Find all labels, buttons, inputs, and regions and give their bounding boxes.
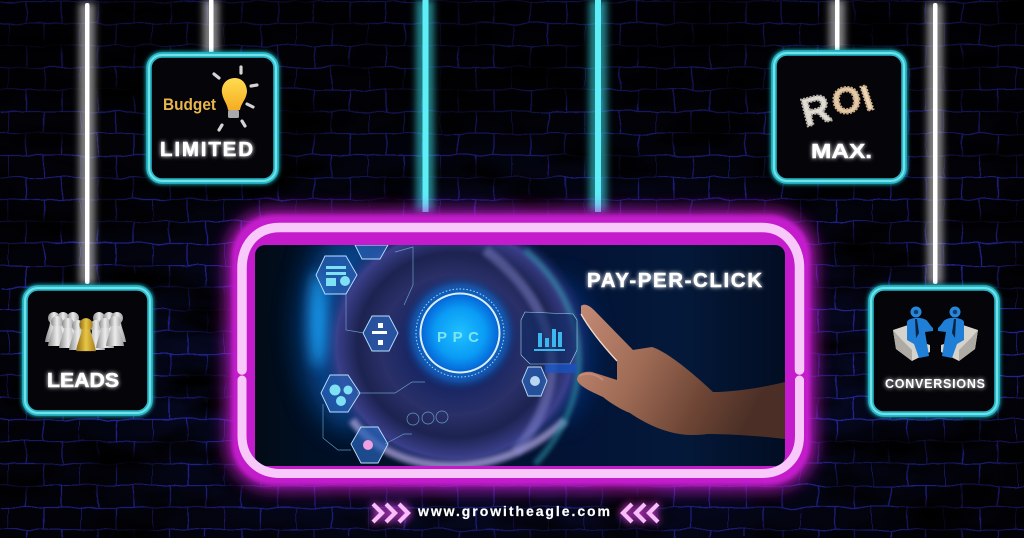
conversions label: CONVERSIONS (885, 377, 985, 391)
max label: MAX. (811, 141, 872, 163)
panel: main PPC neon frame (226, 210, 816, 490)
panel: budget limited (149, 55, 276, 181)
image: PPC hand illustration (255, 245, 785, 466)
leads label: LEADS (47, 370, 119, 392)
icon: ROI jewelled letters: R (797, 86, 836, 136)
icon: ROI jewelled letters (797, 77, 878, 136)
footer chevrons right (623, 504, 658, 522)
icon: pawns (45, 312, 126, 351)
neon tube (242, 228, 800, 370)
chart hexagon (521, 312, 577, 373)
budget label: Budget (163, 95, 216, 114)
icon: hand (577, 305, 785, 439)
icon: ROI jewelled letters: I (856, 77, 878, 119)
white neon line far left (79, 3, 95, 284)
cyan neon line left (416, 0, 434, 212)
hexagon icons (316, 245, 547, 463)
circuit details (323, 247, 448, 450)
footer chevrons left (373, 504, 408, 522)
icon: ROI jewelled letters: O (829, 78, 864, 123)
footer website url: www.growitheagle.com (417, 503, 610, 519)
panel: leads (25, 288, 150, 413)
white neon line to budget box (203, 0, 219, 52)
panel: conversions (871, 288, 997, 414)
icon: two seated people (893, 306, 978, 361)
icon: light bulb (214, 67, 257, 130)
white neon line far right (927, 3, 943, 284)
pay-per-click label: PAY-PER-CLICK (587, 269, 762, 292)
limited label: LIMITED (160, 138, 253, 161)
panel: ROI max (774, 53, 904, 181)
white neon line to ROI box (829, 0, 845, 50)
PPC label: PPC (437, 329, 479, 346)
cyan neon line right (589, 0, 607, 212)
